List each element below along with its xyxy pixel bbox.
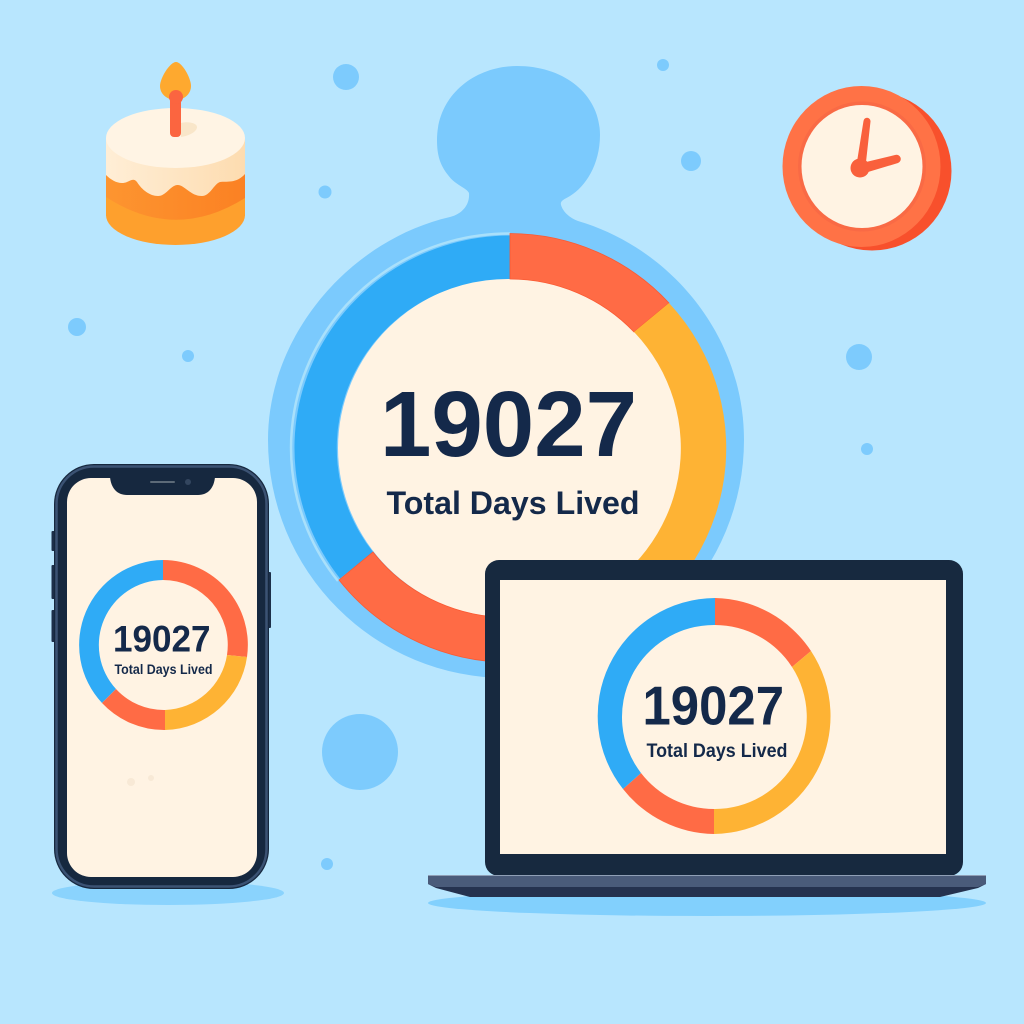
decorative bubbles: [68, 59, 873, 870]
phone shadow: [52, 881, 284, 905]
phone number: 19027: [113, 618, 210, 660]
laptop caption: Total Days Lived: [646, 740, 788, 762]
donut centre: [338, 278, 682, 618]
laptop number: 19027: [642, 674, 784, 736]
phone body: [54, 464, 269, 889]
phone donut: [79, 560, 248, 730]
segment: orange top: [510, 234, 669, 332]
laptop lid: [485, 560, 963, 876]
segment: blue: [294, 236, 510, 578]
phone screen: [67, 478, 257, 877]
laptop donut: [598, 598, 831, 834]
segment: orange bottom: [339, 552, 520, 662]
laptop screen: [500, 580, 946, 854]
main caption: Total Days Lived: [386, 485, 640, 521]
phone: [52, 464, 284, 905]
pale rim: [291, 233, 510, 581]
laptop shadow: [428, 890, 986, 916]
laptop: [428, 560, 986, 916]
phone notch: [110, 477, 215, 495]
segment: yellow: [585, 303, 726, 643]
icon: clock: [782, 86, 952, 250]
laptop base: [428, 875, 986, 897]
phone caption: Total Days Lived: [114, 662, 212, 677]
main number: 19027: [380, 372, 637, 476]
main donut chart: [291, 233, 726, 662]
icon: birthday cake: [106, 62, 245, 245]
person silhouette behind donut: [268, 66, 744, 678]
phone side buttons: [52, 531, 271, 642]
